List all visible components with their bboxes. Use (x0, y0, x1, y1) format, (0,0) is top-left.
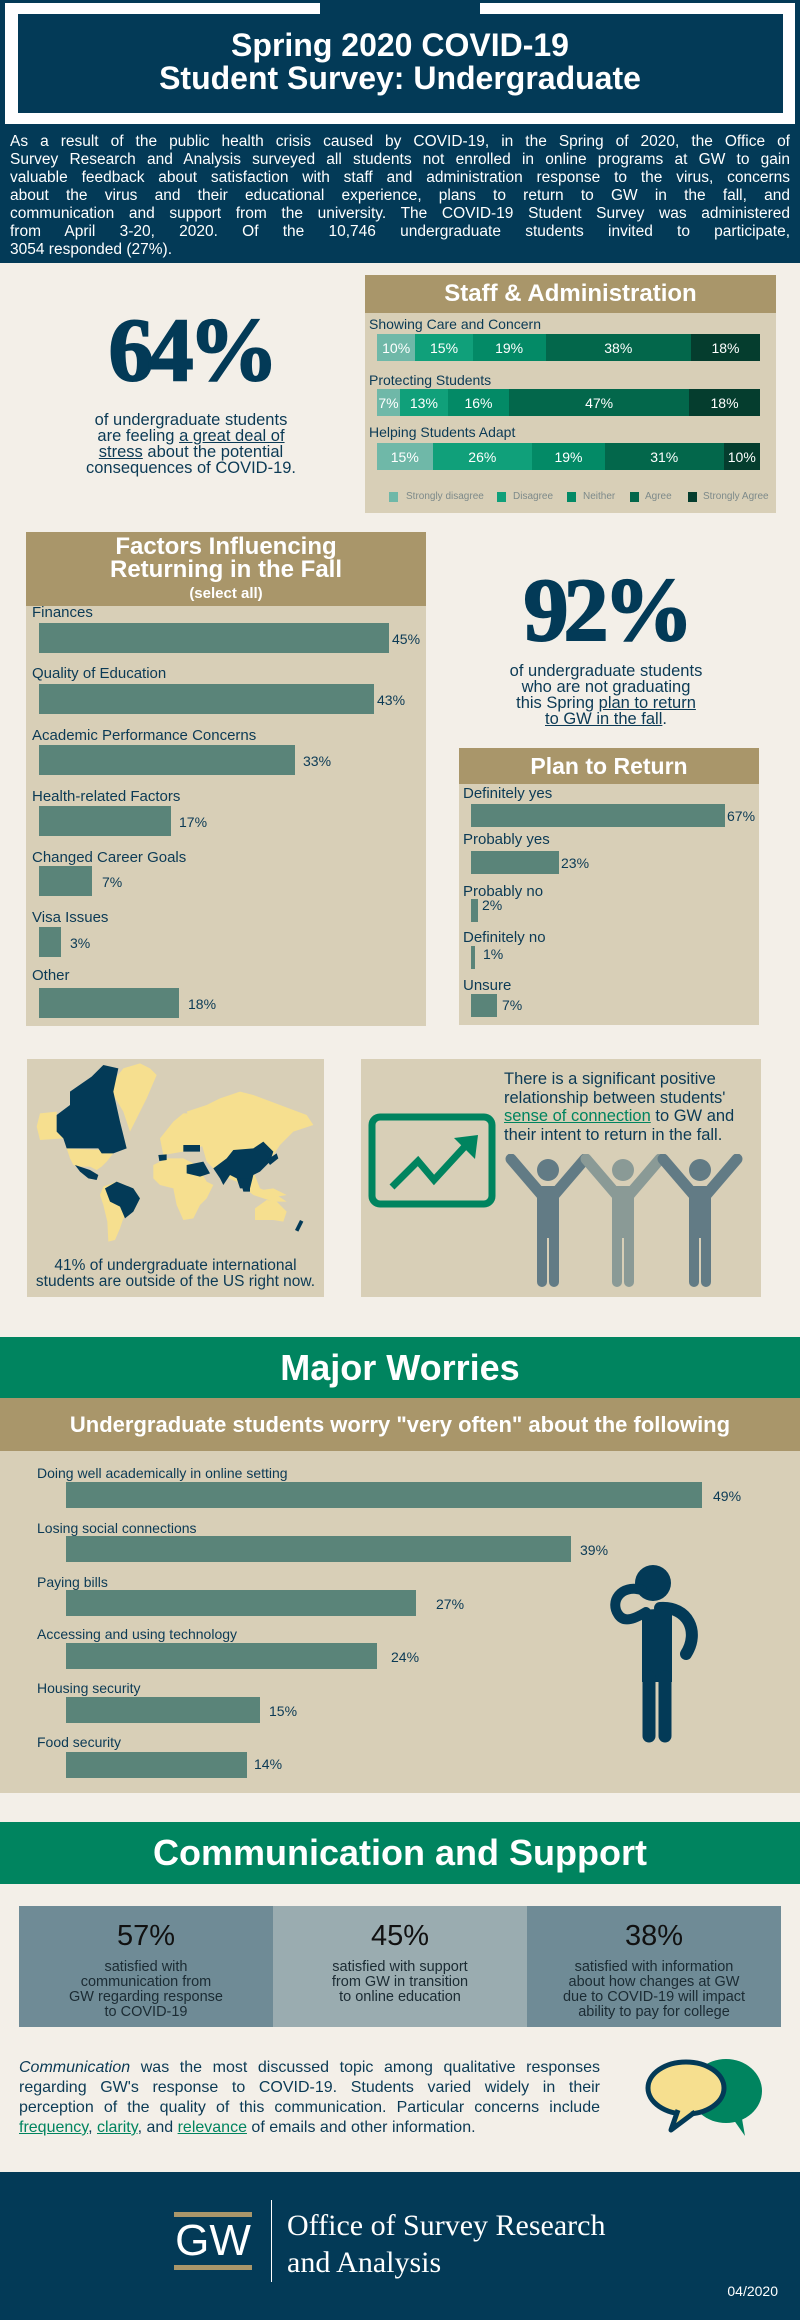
panel: plan to return: Definitely no (463, 929, 546, 946)
panel: plan to return: Probably no (463, 883, 543, 900)
factor bars: 43% (377, 692, 405, 708)
stat: 64% stress: are feeling a great deal of (97, 427, 285, 445)
panel: plan to return (459, 748, 759, 1025)
icon: speech bubbles (646, 2059, 762, 2136)
panel: worries chart: Doing well academically in online setting (37, 1465, 288, 1481)
title (159, 27, 641, 96)
stat: 92% plan to return (510, 561, 702, 728)
stat: 92% plan to return: of undergraduate students (510, 662, 702, 680)
stat: 57%: satisfied with (104, 1959, 188, 1975)
factor bars: Changed Career Goals (32, 849, 186, 866)
panel: factors influencing returning (26, 532, 426, 1026)
text: to GW in the fall. (545, 710, 667, 728)
map caption (36, 1257, 315, 1290)
intro text: about the virus and their educational experience, plans to return to GW in the fall, and (10, 187, 790, 204)
communication paragraph: regarding GW's response to COVID-19. Students varied widely in their (19, 2079, 600, 2096)
stacked bar: protecting (377, 389, 760, 416)
stat: 38%: 38% (625, 1920, 683, 1952)
heading: communication and support: Communication and Support (153, 1832, 647, 1873)
stacked bar: protecting: 18% (711, 394, 739, 410)
stacked bar: adapt (377, 443, 760, 470)
stat: 92% plan to return: this Spring plan to return (516, 694, 696, 712)
panel: sense of connection (361, 1059, 761, 1297)
icon: three people (506, 1154, 742, 1287)
heading: major worries: Major Worries (280, 1347, 520, 1388)
panel: plan to return: Definitely yes (463, 785, 552, 802)
office name (287, 2209, 606, 2279)
heading: Staff & Administration (444, 280, 697, 307)
heading (459, 748, 759, 784)
factor bars: 7% (102, 874, 122, 890)
connection text: relationship between students' (504, 1088, 725, 1106)
intro text: 3054 responded (27%). (10, 241, 172, 258)
text: Showing Care and Concern (369, 316, 541, 332)
icon: trend chart (368, 1114, 496, 1208)
panel: worries chart: Housing security (37, 1680, 140, 1696)
legend (389, 491, 769, 502)
connection text: sense of connection to GW and (504, 1107, 734, 1125)
stat: 45% (273, 1906, 527, 2027)
panel: plan to return: Unsure (463, 977, 511, 994)
subheading: worry very often (0, 1398, 800, 1451)
stacked bar: adapt: 19% (554, 448, 582, 464)
heading: Factors Influencing (115, 533, 337, 560)
panel: worries chart: 15% (269, 1703, 297, 1719)
stacked bar: care (377, 334, 760, 361)
map caption: students are outside of the US right now. (36, 1273, 315, 1290)
subheading: worry very often: Undergraduate students worry "very often" about the following (70, 1412, 730, 1437)
heading: Plan to Return (530, 753, 688, 779)
text: Protecting Students (369, 372, 491, 388)
stacked bar: protecting: 16% (464, 394, 492, 410)
stat: 64% stress (86, 301, 296, 477)
panel: worries chart: Accessing and using technology (37, 1626, 237, 1642)
stat: 64% stress: stress about the potential (99, 443, 283, 461)
stat: 57%: 57% (117, 1920, 175, 1952)
stacked bar: care: 19% (495, 340, 523, 356)
stat boxes (19, 1906, 781, 2027)
panel: worries chart (0, 1451, 800, 1793)
stat: 38%: satisfied with information (575, 1959, 733, 1975)
stacked bar: protecting: 7% (378, 394, 399, 410)
panel: staff & administration (365, 275, 776, 513)
title: Spring 2020 COVID-19 (231, 27, 569, 63)
stacked bar: care: 38% (604, 340, 632, 356)
factor bars: 3% (70, 935, 90, 951)
stat: 92% plan to return: 92% (524, 561, 688, 660)
factor bars: Health-related Factors (32, 788, 180, 805)
panel: plan to return: 2% (482, 897, 502, 913)
factor bars: Academic Performance Concerns (32, 727, 256, 744)
legend: Disagree (513, 491, 553, 502)
heading (365, 275, 776, 313)
stat: 45%: 45% (371, 1920, 429, 1952)
stacked bar: adapt: 15% (391, 448, 419, 464)
text: consequences of COVID-19. (86, 459, 296, 477)
stat: 57% (19, 1906, 273, 2027)
factor bars: 45% (392, 631, 420, 647)
communication paragraph: frequency, clarity, and relevance of emails and other information. (19, 2119, 476, 2136)
panel: worries chart: 24% (391, 1649, 419, 1665)
legend: Strongly Agree (703, 491, 769, 502)
panel: plan to return: 1% (483, 946, 503, 962)
stat: 92% plan to return: who are not graduating (522, 678, 690, 696)
stat: 57%: communication from (81, 1974, 211, 1990)
communication paragraph: Communication was the most discussed topic among qualitative responses (19, 2059, 600, 2076)
heading: communication and support (0, 1822, 800, 1884)
footer (0, 2172, 800, 2320)
panel: plan to return: 23% (561, 855, 589, 871)
title frame (5, 3, 795, 124)
stat: 57%: to COVID-19 (104, 2004, 188, 2020)
connection text: There is a significant positive (504, 1070, 716, 1088)
panel: worries chart: 14% (254, 1756, 282, 1772)
panel: worries chart: 39% (580, 1542, 608, 1558)
panel: worries chart: Paying bills (37, 1574, 108, 1590)
stat: 45%: from GW in transition (332, 1974, 468, 1990)
office name: and Analysis (287, 2246, 441, 2279)
stat: 38% (527, 1906, 781, 2027)
title: Student Survey: Undergraduate (159, 60, 641, 96)
heading: major worries (0, 1337, 800, 1398)
legend: Neither (583, 491, 615, 502)
legend: Strongly disagree (406, 491, 484, 502)
intro text: valuable feedback about satisfaction with staff and administration response to the virus, concerns (10, 169, 790, 186)
factor bars: Visa Issues (32, 909, 108, 926)
factor bars: Finances (32, 604, 93, 621)
panel: plan to return: Probably yes (463, 831, 550, 848)
stacked bar: adapt: 26% (468, 448, 496, 464)
panel: worries chart: 27% (436, 1596, 464, 1612)
stat: 64% stress: of undergraduate students (95, 411, 287, 429)
map caption: 41% of undergraduate international (54, 1257, 297, 1274)
panel: international map (27, 1059, 324, 1297)
intro text (10, 133, 790, 258)
icon: worried person (610, 1565, 698, 1742)
intro text: communication and support from the university. The COVID-19 Student Survey was administered (10, 205, 790, 222)
stat: 64% stress: 64% (108, 301, 274, 400)
heading: Returning in the Fall (110, 556, 342, 583)
stacked bar: adapt: 10% (728, 448, 756, 464)
logo: GW: GW (175, 2216, 251, 2265)
stat: 57%: GW regarding response (69, 1989, 223, 2005)
panel: plan to return: 7% (502, 997, 522, 1013)
factor bars: 33% (303, 753, 331, 769)
panel: worries chart: Losing social connections (37, 1520, 197, 1536)
office name: Office of Survey Research (287, 2209, 606, 2242)
stat: 38%: due to COVID-19 will impact (563, 1989, 745, 2005)
date: 04/2020 (727, 2283, 778, 2299)
communication paragraph: perception of the quality of this communication. Particular concerns include (19, 2099, 600, 2116)
communication paragraph (19, 2059, 600, 2136)
intro text: Survey Research and Analysis surveyed all students not enrolled in online programs at GW to gain (10, 151, 790, 168)
stat: 38%: ability to pay for college (578, 2004, 730, 2020)
intro text: As a result of the public health crisis caused by COVID-19, in the Spring of 2020, the Office of (10, 133, 790, 150)
stat: 38%: about how changes at GW (569, 1974, 739, 1990)
panel: worries chart: 49% (713, 1488, 741, 1504)
connection text (504, 1070, 734, 1144)
stacked bar: adapt: 31% (650, 448, 678, 464)
stacked bar: protecting: 47% (585, 394, 613, 410)
panel: worries chart: Food security (37, 1734, 121, 1750)
panel: plan to return: 67% (727, 808, 755, 824)
icon: world map (36, 1064, 314, 1242)
stacked bar: care: 15% (430, 340, 458, 356)
connection text: their intent to return in the fall. (504, 1126, 722, 1144)
factor bars: Other (32, 967, 70, 984)
factor bars (32, 604, 420, 1018)
header background (0, 0, 800, 263)
stacked bar: protecting: 13% (410, 394, 438, 410)
stat: 45%: satisfied with support (332, 1959, 468, 1975)
factor bars: Quality of Education (32, 665, 166, 682)
factor bars: 18% (188, 996, 216, 1012)
intro text: from April 3-20, 2020. Of the 10,746 undergraduate students invited to participate, (10, 223, 790, 240)
text: Helping Students Adapt (369, 424, 515, 440)
stacked bar: care: 10% (382, 340, 410, 356)
stat: 45%: to online education (339, 1989, 461, 2005)
heading (26, 532, 426, 606)
heading: (select all) (189, 585, 263, 602)
legend: Agree (645, 491, 672, 502)
factor bars: 17% (179, 814, 207, 830)
stacked bar: care: 18% (711, 340, 740, 356)
